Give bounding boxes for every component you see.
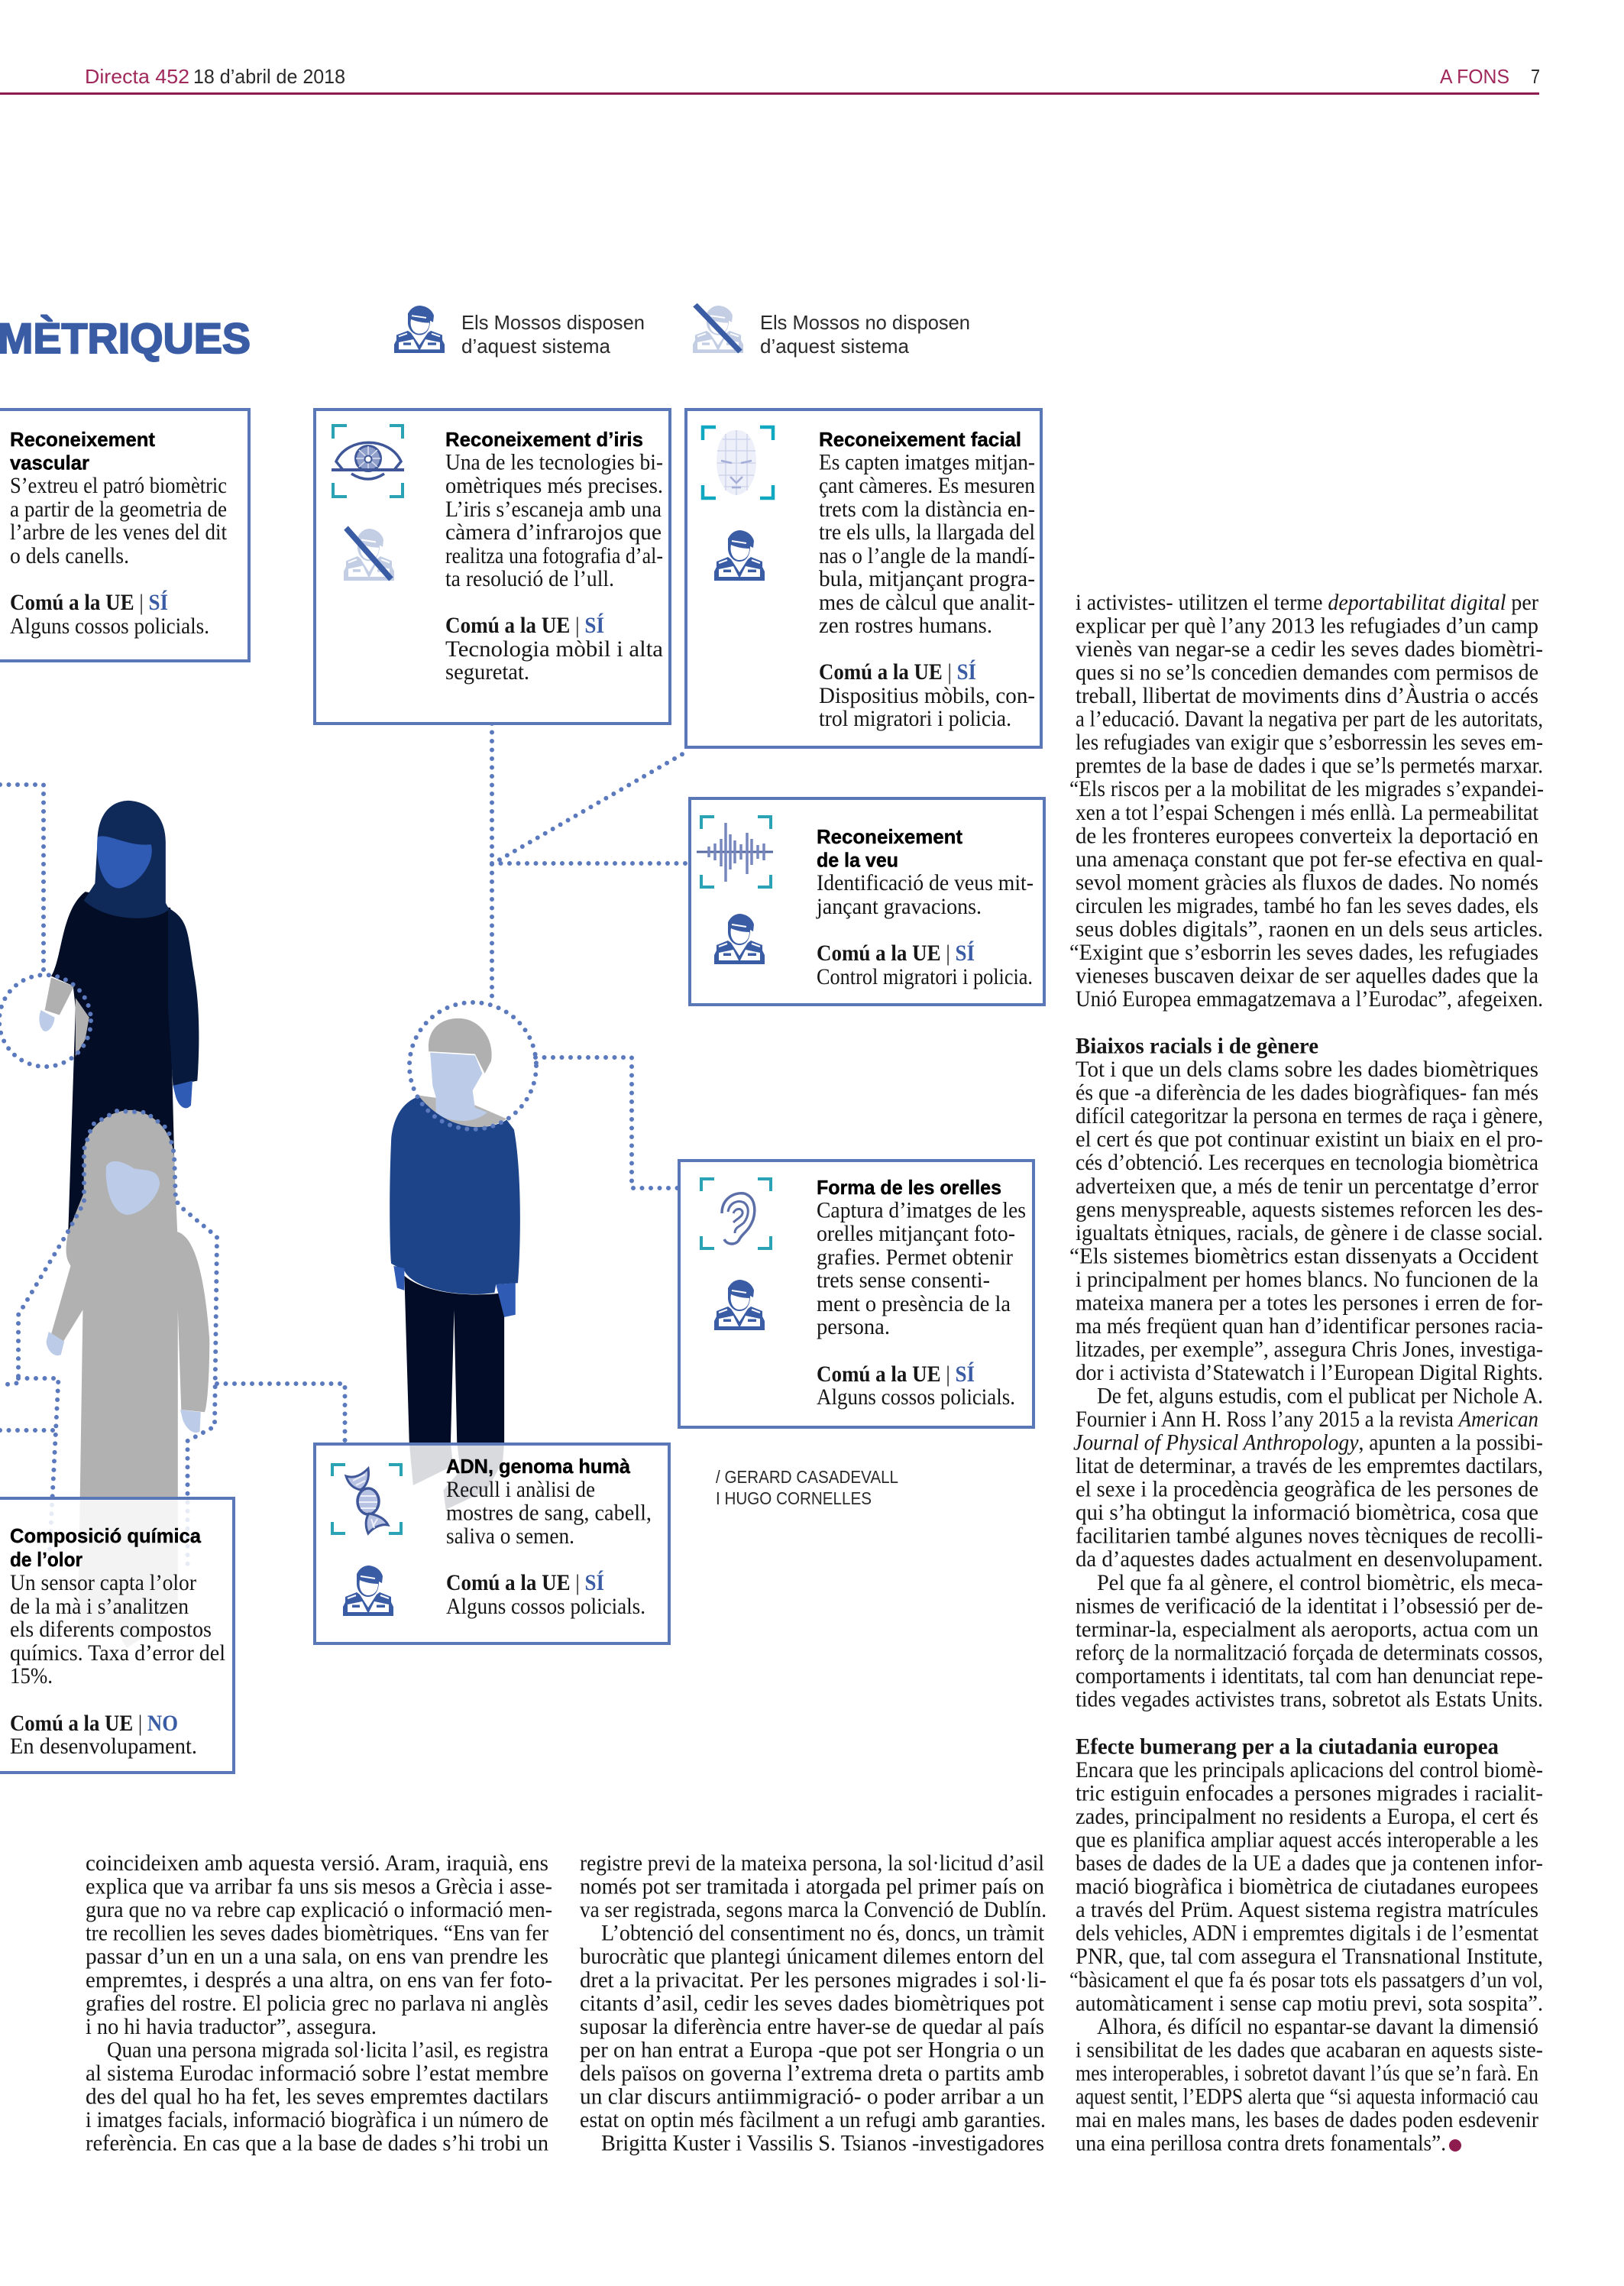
panel: iris recognition: Comú a la UE | SÍ — [445, 613, 604, 638]
panel: facial recognition: trets com la distància en- — [819, 497, 1035, 522]
article column 3: opening text: “Exigint que s’esborrin les seves dades, les refugiades — [1069, 940, 1538, 965]
panel: facial recognition: zen rostres humans. — [819, 613, 992, 638]
legend: system available — [394, 306, 645, 358]
icon: available — [714, 530, 765, 581]
panel: voice recognition: de la veu — [817, 849, 898, 872]
panel: iris recognition: Tecnologia mòbil i alta — [445, 636, 663, 662]
panel: odour chemistry: els diferents compostos — [10, 1617, 212, 1642]
section: racial and gender bias: litzades, per exemple”, assegura Chris Jones, investiga- — [1076, 1337, 1543, 1362]
section: racial and gender bias: reforç de la normalització forçada de determinats cossos, — [1076, 1640, 1543, 1665]
section: racial and gender bias: De fet, alguns estudis, com el publicat per Nichole A. — [1097, 1383, 1543, 1409]
article column 2 — [580, 1850, 1047, 2156]
panel: odour chemistry: Un sensor capta l’olor — [10, 1570, 196, 1595]
panel: vascular recognition: o dels canells. — [10, 543, 129, 568]
panel: iris recognition — [315, 410, 670, 724]
credit: I HUGO CORNELLES — [716, 1488, 872, 1508]
icon: available — [714, 914, 765, 964]
section: boomerang effect: Alhora, és difícil no espantar-se davant la dimensió — [1097, 2014, 1538, 2039]
title: MÈTRIQUES — [0, 314, 251, 362]
article column 2: per on han entrat a Europa -que pot ser Hongria o un — [580, 2037, 1044, 2062]
panel: odour chemistry: En desenvolupament. — [10, 1734, 197, 1759]
panel: DNA: Recull i anàlisi de — [446, 1477, 595, 1502]
section: racial and gender bias: el sexe i la procedència geogràfica de les persones de — [1076, 1477, 1538, 1502]
article column 1: Quan una persona migrada sol·licita l’asil, es registra — [107, 2037, 548, 2062]
panel: odour chemistry: 15%. — [10, 1663, 53, 1689]
page header: Directa 452 — [85, 65, 189, 88]
article column 1: al sistema Eurodac informació sobre l’estat membre — [86, 2061, 548, 2086]
section: racial and gender bias: difícil categoritzar la persona en termes de raça i gènere, — [1076, 1103, 1543, 1128]
article column 1: referència. En cas que a la base de dades s’hi trobi un — [86, 2130, 548, 2156]
article column 3: opening text: de les fronteres europees converteix la deportació en — [1076, 823, 1538, 848]
panel: ear shape: persona. — [817, 1314, 890, 1339]
panel: facial recognition: çant càmeres. Es mesuren — [819, 473, 1035, 498]
article column 2: Brigitta Kuster i Vassilis S. Tsianos -investigadores — [601, 2130, 1044, 2156]
section: racial and gender bias: Tot i que un dels clams sobre les dades biomètriques — [1076, 1057, 1538, 1082]
panel: facial recognition: bula, mitjançant progra- — [819, 566, 1035, 591]
panel: odour chemistry: químics. Taxa d’error del — [10, 1640, 225, 1666]
icon: available — [343, 1566, 393, 1616]
article column 2: burocràtic que plantegi únicament dilemes entorn del — [580, 1944, 1044, 1969]
section: boomerang effect: zades, principalment no residents a Europa, el cert és — [1076, 1804, 1538, 1829]
panel: iris recognition: Reconeixement d’iris — [445, 428, 643, 451]
article column 1: i no hi havia traductor”, assegura. — [86, 2014, 377, 2039]
panel: iris recognition: realitza una fotografia d’al- — [445, 543, 663, 568]
panel: iris recognition: omètriques més precises. — [445, 473, 663, 498]
section: boomerang effect: Encara que les principals aplicacions del control biomè- — [1076, 1757, 1543, 1782]
section: racial and gender bias: “Els sistemes biomètrics estan dissenyats a Occident — [1069, 1243, 1539, 1268]
article column 3: opening text — [1069, 590, 1544, 1012]
section: racial and gender bias: el cert és que pot continuar existint un biaix en el pro- — [1076, 1127, 1543, 1152]
panel: vascular recognition: Comú a la UE | SÍ — [10, 590, 168, 615]
section: racial and gender bias: i principalment per homes blancs. No funcionen de la — [1076, 1267, 1538, 1292]
section: racial and gender bias: Pel que fa al gènere, el control biomètric, els meca- — [1097, 1570, 1543, 1595]
article column 2: citants d’asil, cedir les seves dades biomètriques pot — [580, 1990, 1045, 2016]
panel: facial recognition: tre els ulls, la llargada del — [819, 520, 1035, 545]
panel: ear shape: Forma de les orelles — [817, 1176, 1001, 1199]
section: boomerang effect: aquest sentit, l’EDPS alerta que “si aquesta informació cau — [1076, 2084, 1538, 2109]
legend: system available: Els Mossos disposen — [461, 311, 645, 334]
panel: odour chemistry: de la mà i s’analitzen — [10, 1594, 189, 1619]
icon: DNA helix — [327, 1458, 408, 1540]
dotted connectors — [0, 724, 689, 1566]
panel: vascular recognition: Alguns cossos policials. — [10, 614, 209, 639]
page header: 7 — [1531, 65, 1540, 88]
section: racial and gender bias: Fournier i Ann H. Ross l’any 2015 a la revista American — [1076, 1407, 1538, 1432]
section: boomerang effect: tric estiguin enfocades a persones migrades i racialit- — [1076, 1780, 1543, 1806]
article column 2: suposar la diferència entre haver-se de quedar al país — [580, 2014, 1044, 2039]
panel: iris recognition: Una de les tecnologies bi- — [445, 450, 663, 475]
section: racial and gender bias: facilitarien també algunes noves tècniques de recolli- — [1076, 1523, 1543, 1549]
panel: voice recognition: jançant gravacions. — [816, 894, 982, 919]
icon: face mesh — [703, 427, 773, 498]
panel: iris recognition: ta resolució de l’ull. — [445, 566, 614, 591]
section: boomerang effect: Efecte bumerang per a la ciutadania europea — [1076, 1734, 1499, 1759]
panel: ear shape: ment o presència de la — [817, 1291, 1011, 1316]
section: racial and gender bias: adverteixen que, a més de tenir un percentatge d’error — [1076, 1174, 1538, 1199]
panel: DNA: saliva o semen. — [446, 1523, 574, 1549]
section: boomerang effect: dels vehicles, ADN i empremtes digitals i de l’esmentat — [1076, 1921, 1539, 1946]
section: racial and gender bias: igualtats ètniques, racials, de gènere i de classe social. — [1076, 1220, 1543, 1245]
panel: odour chemistry: Comú a la UE | NO — [10, 1711, 178, 1736]
panel: DNA: Alguns cossos policials. — [446, 1594, 645, 1619]
credit: / GERARD CASADEVALL — [716, 1467, 898, 1487]
panel: facial recognition: Dispositius mòbils, con- — [819, 683, 1035, 708]
panel: facial recognition: Reconeixement facial — [819, 428, 1021, 451]
article column 1: des del qual ho ha fet, les seves empremtes dactilars — [86, 2084, 548, 2109]
article column 2: un clar discurs antiimmigració- o poder arribar a un — [580, 2084, 1044, 2109]
article column 2: L’obtenció del consentiment no és, doncs, un tràmit — [601, 1921, 1045, 1946]
panel: iris recognition: seguretat. — [445, 659, 529, 685]
panel: voice recognition: Identificació de veus mit- — [817, 870, 1034, 895]
section: racial and gender bias: terminar-la, especialment als aeroports, actua com un — [1076, 1617, 1538, 1642]
panel: vascular recognition: S’extreu el patró biomètric — [10, 473, 227, 498]
panel: odour chemistry: de l’olor — [10, 1548, 82, 1571]
section: boomerang effect: mació biogràfica i biomètrica de ciutadanes europees — [1076, 1874, 1538, 1899]
panel: vascular recognition — [0, 410, 249, 661]
section: boomerang effect: automàticament i sense cap motiu previ, sota sospita”. — [1076, 1990, 1543, 2016]
article column 1: coincideixen amb aquesta versió. Aram, iraquià, ens — [86, 1850, 548, 1876]
panel: ear shape: Comú a la UE | SÍ — [817, 1362, 975, 1387]
panel: iris recognition: càmera d’infrarojos que — [445, 520, 662, 545]
section: boomerang effect: mes interoperables, i sobretot davant l’ús que se’n farà. En — [1076, 2061, 1538, 2086]
article column 1: passar d’un en un a una sala, on ens van prendre les — [86, 1944, 548, 1969]
article column 1: tre recollien les seves dades biomètriques. “Ens van fer — [86, 1921, 548, 1946]
section: racial and gender bias: dor i activista d’Statewatch i l’European Digital Rights. — [1076, 1360, 1543, 1385]
panel: facial recognition: nas o l’angle de la mandí- — [819, 543, 1035, 568]
article column 3: opening text: i activistes- utilitzen el terme deportabilitat digital per — [1076, 590, 1538, 615]
panel: facial recognition: Es capten imatges mitjan- — [819, 450, 1035, 475]
panel: odour chemistry: Composició química — [10, 1524, 202, 1547]
legend: system not available — [693, 305, 970, 358]
section: racial and gender bias: mateixa manera per a totes les persones i erren de for- — [1076, 1290, 1543, 1315]
article column 3: opening text: explicar per què l’any 2013 les refugiades d’un camp — [1076, 613, 1538, 639]
section: racial and gender bias: nismes de verificació de la identitat i l’obsessió per de- — [1076, 1593, 1543, 1618]
section: racial and gender bias: ma més freqüent quan han d’identificar persones racia- — [1076, 1313, 1543, 1339]
section: boomerang effect: bases de dades de la UE a dades que ja contenen infor- — [1076, 1850, 1543, 1876]
section: racial and gender bias — [1069, 1033, 1543, 1711]
icon: waveform — [697, 817, 773, 887]
panel: iris recognition: L’iris s’escaneja amb una — [445, 497, 662, 522]
section: boomerang effect: PNR, que, tal com assegura el Transnational Institute, — [1076, 1944, 1543, 1969]
section: racial and gender bias: és que -a diferència de les dades biogràfiques- fan més — [1076, 1080, 1538, 1106]
article column 2: dels països on governa l’extrema dreta o partits amb — [580, 2061, 1044, 2086]
section: racial and gender bias: cés d’obtenció. Les recerques en tecnologia biomètrica — [1076, 1150, 1538, 1175]
article column 3: opening text: treball, llibertat de moviments dins d’Àustria o accés — [1076, 683, 1538, 708]
panel: ear shape: grafies. Permet obtenir — [817, 1245, 1013, 1270]
end mark — [1449, 2139, 1461, 2152]
figure: man in blue sweater — [390, 1018, 520, 1510]
panel: ear shape — [679, 1161, 1034, 1427]
panel: ear shape: Alguns cossos policials. — [817, 1384, 1015, 1410]
section: racial and gender bias: tides vegades activistes trans, sobretot als Estats Units. — [1076, 1686, 1543, 1711]
panel: odour chemistry — [0, 1498, 234, 1773]
article column 2: dret a la privacitat. Per les persones migrades i sol·li- — [580, 1967, 1047, 1993]
panel: voice recognition: Control migratori i policia. — [817, 964, 1033, 989]
panel: facial recognition: mes de càlcul que analit- — [819, 590, 1035, 615]
panel: ear shape: Captura d’imatges de les — [817, 1198, 1026, 1223]
icon: not available — [344, 528, 394, 581]
article column 1: explica que va arribar fa uns sis mesos a Grècia i asse- — [86, 1874, 552, 1899]
article column 3: opening text: seus dobles digitals”, raonen en un dels seus articles. — [1076, 916, 1543, 941]
section: boomerang effect: que es planifica ampliar aquest accés interoperable a les — [1076, 1828, 1538, 1853]
panel: vascular recognition: a partir de la geometria de — [10, 497, 227, 522]
panel: facial recognition — [686, 410, 1041, 747]
panel: DNA: ADN, genoma humà — [446, 1455, 631, 1478]
article column 3: opening text: premtes de la base de dades i que se’ls permetés marxar. — [1076, 753, 1543, 779]
page header: 18 d’abril de 2018 — [193, 65, 345, 88]
article column 1: gura que no va rebre cap explicació o informació men- — [86, 1897, 552, 1922]
panel: voice recognition: Comú a la UE | SÍ — [817, 941, 975, 966]
section: racial and gender bias: Journal of Physical Anthropology, apunten a la possibi- — [1073, 1430, 1543, 1455]
article column 3: opening text: les refugiades van exigir que s’esborressin les seves em- — [1076, 730, 1543, 755]
article column 1: grafies del rostre. El policia grec no parlava ni anglès — [86, 1990, 548, 2016]
article column 3: opening text: una amenaça constant que pot fer-se efectiva en qual- — [1076, 847, 1543, 872]
panel: vascular recognition: Reconeixement — [10, 428, 155, 451]
icon: available — [714, 1280, 765, 1330]
section: boomerang effect: i sensibilitat de les dades que acabaran en aquests siste- — [1076, 2037, 1543, 2062]
legend: system not available: d’aquest sistema — [760, 335, 910, 358]
section: racial and gender bias: da d’aquestes dades actualment en desenvolupament. — [1076, 1546, 1543, 1572]
section: racial and gender bias: litat de determinar, a través de les empremtes dactilars, — [1076, 1453, 1543, 1478]
article column 3: opening text: vieneses buscaven deixar de ser aquelles dades que la — [1076, 963, 1538, 989]
panel: voice recognition: Reconeixement — [817, 825, 962, 848]
panel: voice recognition — [690, 798, 1044, 1005]
article column 3: opening text: circulen les migrades, també ho fan les seves dades, els — [1076, 893, 1538, 918]
page header — [0, 65, 1540, 95]
article column 1: empremtes, i després a una altra, on ens van fer foto- — [86, 1967, 552, 1993]
article column 1: i imatges facials, informació biogràfica i un número de — [86, 2107, 548, 2132]
panel: facial recognition: Comú a la UE | SÍ — [819, 659, 976, 685]
article column 3: opening text: “Els riscos per a la mobilitat de les migrades s’expandei- — [1069, 776, 1544, 801]
article column 1 — [86, 1850, 552, 2156]
section: racial and gender bias: qui s’ha obtingut la informació biomètrica, cosa que — [1076, 1500, 1538, 1525]
panel: ear shape: trets sense consenti- — [817, 1268, 990, 1293]
figure: grey hooded woman — [47, 1110, 209, 1648]
icon: eye — [332, 426, 404, 497]
panel: vascular recognition: vascular — [10, 452, 89, 474]
legend: system not available: Els Mossos no disposen — [760, 311, 970, 334]
panel: vascular recognition: l’arbre de les venes del dit — [10, 520, 228, 545]
panel: DNA — [315, 1444, 669, 1643]
article column 3: opening text: ques si no se’ls concedien demandes com permisos de — [1076, 660, 1538, 685]
section: boomerang effect: mai en males mans, les bases de dades poden esdevenir — [1076, 2107, 1538, 2132]
panel: DNA: mostres de sang, cabell, — [446, 1501, 652, 1526]
article column 3: opening text: a l’educació. Davant la negativa per part de les autoritats, — [1076, 707, 1543, 732]
panel: facial recognition: trol migratori i policia. — [819, 706, 1011, 731]
section: boomerang effect — [1069, 1734, 1543, 2156]
article column 3: opening text: sevol moment gràcies als fluxos de dades. No només — [1076, 869, 1538, 895]
article column 2: registre previ de la mateixa persona, la sol·licitud d’asil — [580, 1850, 1044, 1876]
section: boomerang effect: “bàsicament el que fa és posar tots els passatgers d’un vol, — [1069, 1967, 1543, 1993]
article column 3: opening text: vienès van negar-se a cedir les seves dades biomètri- — [1076, 636, 1543, 662]
article column 2: estat on optin més fàcilment a un refugi amb garanties. — [580, 2107, 1046, 2132]
section: racial and gender bias: gens menyspreable, aquests sistemes reforcen les des- — [1076, 1196, 1543, 1222]
icon: ear — [701, 1179, 771, 1248]
section: boomerang effect: una eina perillosa contra drets fonamentals”. — [1076, 2130, 1446, 2156]
section: racial and gender bias: Biaixos racials i de gènere — [1076, 1033, 1318, 1059]
page header: A FONS — [1440, 65, 1509, 88]
section: boomerang effect: a través del Prüm. Aquest sistema registra matrícules — [1076, 1897, 1538, 1922]
panel: ear shape: orelles mitjançant foto- — [817, 1221, 1015, 1246]
article column 3: opening text: xen a tot l’espai Schengen i més enllà. La permeabilitat — [1076, 800, 1539, 825]
figure: woman in dark dress — [39, 801, 199, 1232]
article column 2: només pot ser tramitada i atorgada pel primer país on — [580, 1874, 1044, 1899]
article column 3: opening text: Unió Europea emmagatzemava a l’Eurodac”, afegeixen. — [1076, 986, 1543, 1012]
legend: system available: d’aquest sistema — [461, 335, 611, 358]
panel: DNA: Comú a la UE | SÍ — [446, 1570, 604, 1595]
article column 2: va ser registrada, segons marca la Convenció de Dublín. — [580, 1897, 1047, 1922]
section: racial and gender bias: comportaments i identitats, tal com han denunciat repe- — [1076, 1663, 1543, 1689]
credit — [716, 1467, 898, 1508]
